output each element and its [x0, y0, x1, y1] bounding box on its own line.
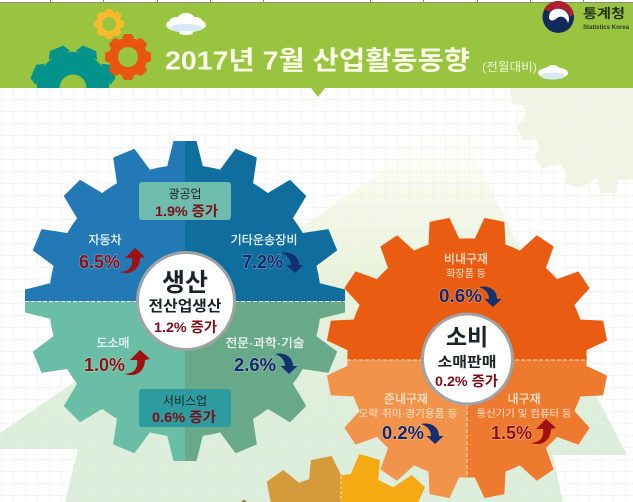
hub: consumption: 소매판매 [438, 354, 496, 370]
item: non-durable goods: 0.6% [439, 286, 482, 306]
hub: production: 전산업생산 [148, 298, 222, 315]
hub: production: 생산 [162, 269, 208, 297]
background green triangle [0, 125, 627, 502]
header band [0, 0, 633, 97]
icon: cloud left [166, 13, 206, 35]
subtitle: (전월대비) [482, 60, 537, 74]
logo: Statistics Korea [542, 0, 629, 33]
box: mining [139, 182, 231, 220]
item: non-durable goods: 비내구재 [444, 252, 488, 266]
hub: production [138, 252, 234, 350]
panel: consumption gear [327, 218, 608, 498]
item: durable goods: 내구재 [507, 392, 541, 406]
item: wholesale retail: 도소매 [96, 336, 130, 350]
item: semi-durable goods: 오락·취미·경기용품 등 [358, 407, 458, 420]
hub: production: 1.2% 증가 [154, 319, 217, 335]
box: mining: 광공업 [168, 187, 202, 201]
item: semi-durable goods: 준내구재 [384, 392, 428, 406]
item: other transport equipment: 7.2% [242, 252, 283, 272]
box: services [139, 389, 231, 427]
item: wholesale retail [84, 336, 150, 375]
icon: orange gear [105, 34, 151, 80]
item: automobile [79, 233, 145, 273]
icon: yellow gear [94, 9, 124, 39]
item: durable goods [476, 392, 572, 444]
icon: teal gear [30, 46, 116, 88]
item: durable goods: 1.5% [491, 423, 532, 443]
title: 2017년 7월 산업활동동향 [165, 46, 470, 76]
logo: Statistics Korea: 통계청 [583, 6, 625, 21]
hub: consumption [422, 314, 512, 404]
item: professional science technology: 2.6% [234, 355, 276, 375]
panel: production gear [25, 141, 345, 461]
background pale gear [510, 88, 633, 193]
item: other transport equipment [230, 233, 304, 273]
item: semi-durable goods: 0.2% [382, 423, 424, 443]
item: automobile: 6.5% [79, 252, 120, 272]
item: non-durable goods [439, 252, 502, 307]
item: professional science technology: 전문·과학·기술 [226, 336, 304, 350]
item: semi-durable goods [358, 392, 458, 444]
box: mining: 1.9% 증가 [155, 203, 218, 219]
item: professional science technology [226, 336, 304, 375]
box: services: 0.6% 증가 [152, 409, 216, 425]
icon: cloud right [538, 65, 568, 80]
item: automobile: 자동차 [88, 233, 122, 247]
hub: consumption: 소비 [446, 324, 488, 350]
hub: consumption: 0.2% 증가 [435, 373, 498, 389]
logo: Statistics Korea: Statistics Korea [583, 24, 629, 31]
item: wholesale retail: 1.0% [84, 355, 125, 375]
item: durable goods: 통신기기 및 컴퓨터 등 [476, 408, 572, 420]
box: services: 서비스업 [163, 394, 207, 408]
item: other transport equipment: 기타운송장비 [230, 233, 298, 247]
bottom yellow gear [241, 454, 425, 502]
item: non-durable goods: 화장품 등 [446, 268, 486, 280]
